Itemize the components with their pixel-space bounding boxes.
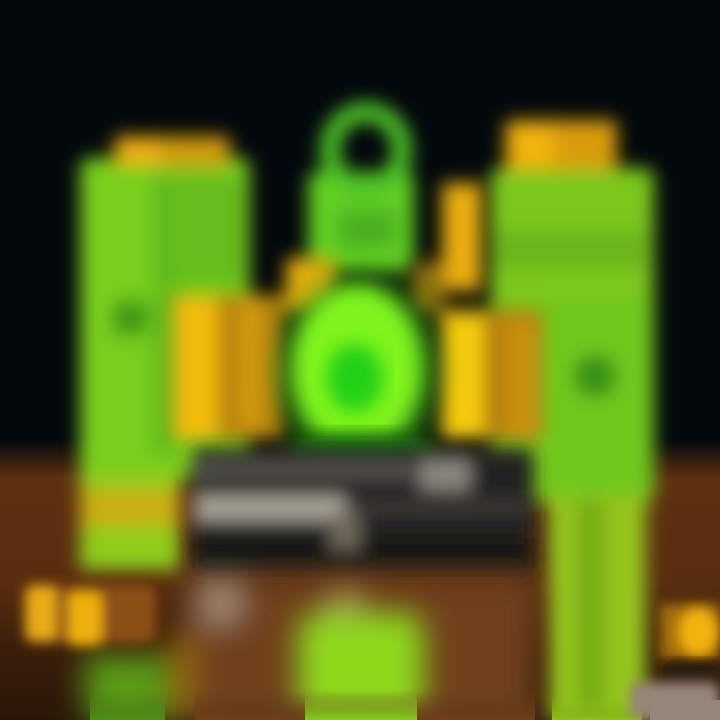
bottom left gold coins [24,585,156,646]
gold coin stacks [172,183,542,440]
glowing padlock lower body [282,278,437,468]
left battery [80,136,250,570]
padlock shackle and body [308,112,414,272]
lower reflection on the table [85,578,535,720]
bottom edge fill [90,690,642,720]
green reflection [298,590,424,720]
right battery [490,120,654,720]
dark metal stack [192,448,534,573]
wooden table [0,440,720,720]
bottom right gold coin and metal [630,604,720,720]
